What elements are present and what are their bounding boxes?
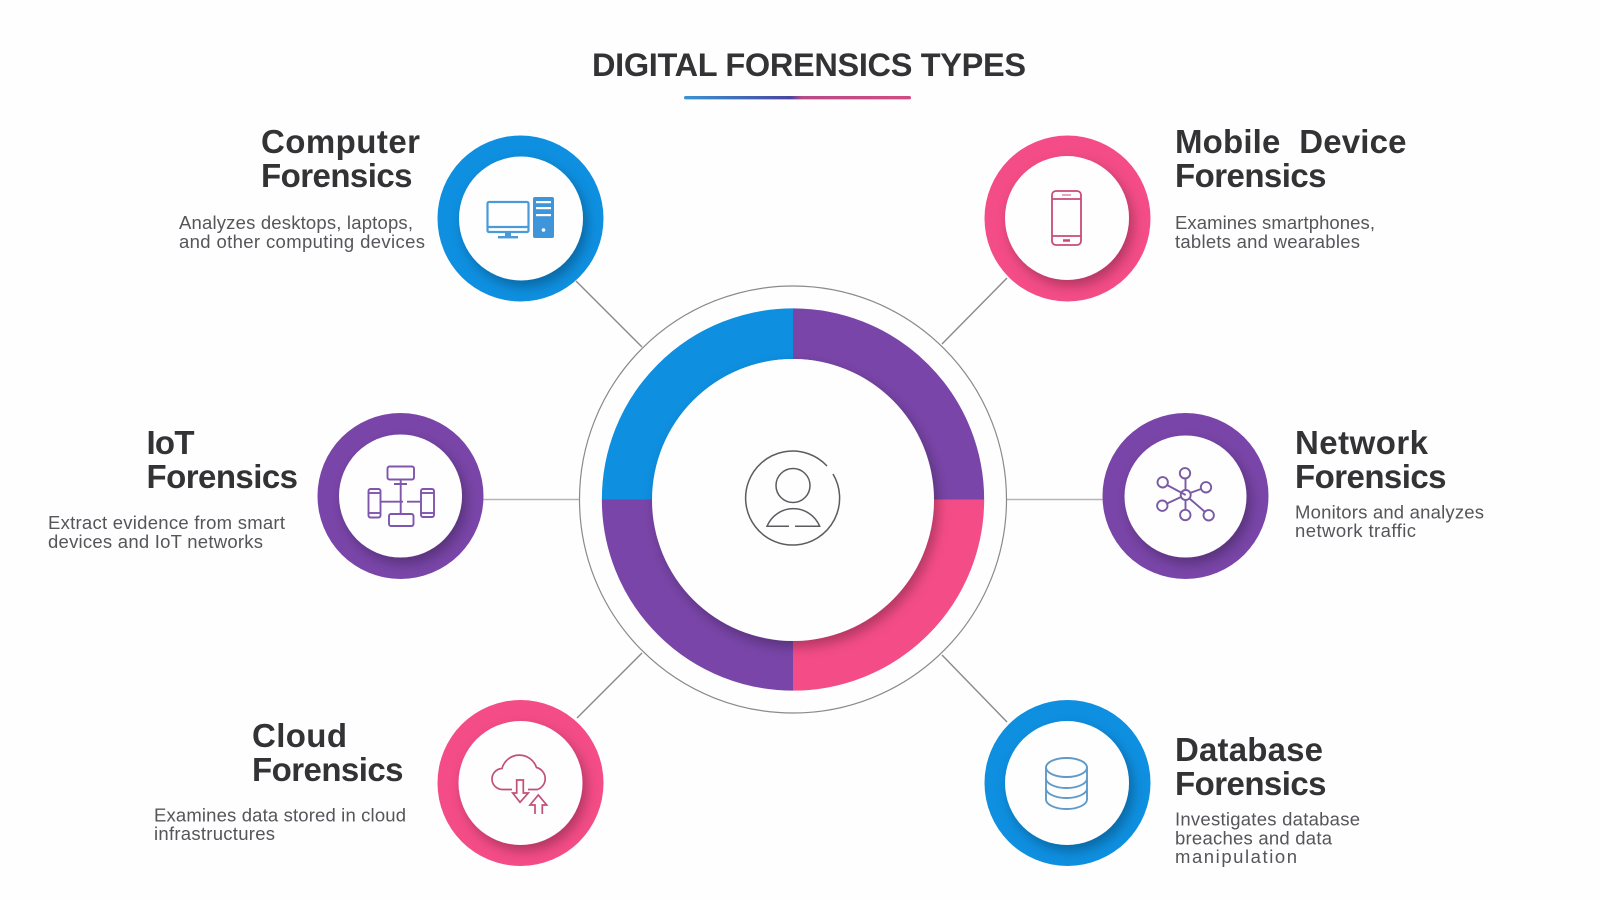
text: computer forensics: Forensics: [261, 157, 412, 194]
text: cloud forensics: [154, 717, 406, 844]
text: cloud forensics: Forensics: [252, 751, 404, 788]
text: network forensics: network traffic: [1295, 520, 1416, 541]
text: iot forensics: Forensics: [146, 458, 298, 495]
text: mobile device forensics: Mobile Device: [1175, 123, 1406, 160]
text: database forensics: [1175, 731, 1360, 867]
text: cloud forensics: Examines data stored in cloud: [154, 804, 406, 826]
icon: smartphone: [1052, 191, 1081, 245]
text: network forensics: Forensics: [1295, 458, 1446, 495]
connector lines: [483, 278, 1103, 722]
text: computer forensics: Computer: [261, 123, 420, 160]
text: network forensics: Network: [1295, 424, 1429, 461]
text: iot forensics: devices and IoT networks: [48, 531, 263, 552]
node: mobile device forensics: [984, 136, 1150, 302]
icon: network hub: [1157, 468, 1214, 520]
node: network forensics: [1102, 413, 1268, 579]
text: iot forensics: Extract evidence from smart: [48, 512, 285, 533]
text: iot forensics: [48, 424, 298, 552]
text: mobile device forensics: tablets and wearables: [1175, 231, 1360, 252]
text: database forensics: Database: [1175, 731, 1323, 768]
text: database forensics: Investigates database: [1175, 808, 1360, 830]
node: iot forensics: [318, 413, 484, 579]
outer thin ring: [580, 286, 1006, 713]
title: DIGITAL FORENSICS TYPES: [592, 47, 1026, 83]
text: mobile device forensics: Forensics: [1175, 157, 1326, 194]
text: computer forensics: Analyzes desktops, laptops,: [179, 212, 413, 233]
text: iot forensics: IoT: [146, 424, 194, 461]
icon: iot network: [368, 466, 434, 526]
title underline: [684, 96, 911, 99]
center disc: [652, 359, 934, 641]
icon: cloud transfer: [492, 755, 547, 814]
icon: desktop computer: [488, 197, 554, 238]
text: mobile device forensics: [1175, 123, 1406, 252]
node: computer forensics: [438, 136, 604, 302]
text: database forensics: manipulation: [1175, 846, 1297, 867]
donut segments: [627, 334, 959, 665]
node: cloud forensics: [438, 700, 604, 866]
text: computer forensics: and other computing devices: [179, 231, 425, 252]
text: mobile device forensics: Examines smartphones,: [1175, 212, 1375, 233]
icon: database: [1046, 758, 1087, 809]
node: database forensics: [984, 700, 1150, 866]
icon: person: [746, 451, 840, 545]
text: database forensics: Forensics: [1175, 765, 1326, 802]
text: network forensics: [1295, 424, 1484, 541]
text: cloud forensics: Cloud: [252, 717, 347, 754]
text: database forensics: breaches and data: [1175, 828, 1333, 848]
text: computer forensics: [179, 123, 425, 252]
central hub: [580, 286, 1006, 713]
text: cloud forensics: infrastructures: [154, 823, 275, 844]
text: network forensics: Monitors and analyzes: [1295, 502, 1484, 522]
